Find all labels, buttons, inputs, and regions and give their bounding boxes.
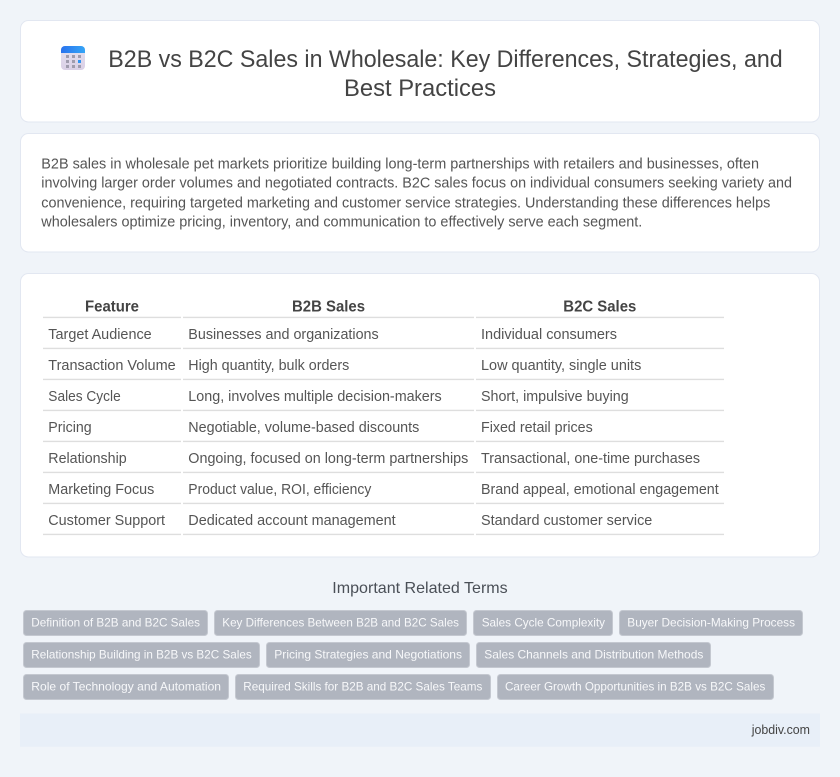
row: pricing: Negotiable, volume-based discounts [188,420,419,436]
tag [266,642,470,668]
tag [24,610,208,636]
tag: Sales Cycle Complexity [482,616,605,630]
row: relationship [48,451,700,467]
panel: header [20,20,820,122]
tag: Pricing Strategies and Negotiations [274,648,462,662]
row: transaction volume [48,358,641,374]
text block: introduction paragraph: involving larger order volumes and negotiated contracts. B2C sales focus on individual consumers seeking variety and [41,175,792,191]
heading: important related terms: Important Related Terms [332,580,508,597]
title [108,46,783,102]
row: customer support: Standard customer service [481,513,652,529]
text block: introduction paragraph: wholesalers optimize pricing, inventory, and communication to effectively serve each segment. [40,214,642,230]
tag [24,674,228,700]
row: marketing focus: Product value, ROI, efficiency [188,482,372,498]
related term tags [24,610,802,700]
tag: Sales Channels and Distribution Methods [484,648,703,662]
row: sales cycle: Short, impulsive buying [481,389,629,405]
table header row [85,299,636,316]
text block: introduction paragraph [40,156,792,230]
row: target audience: Target Audience [48,327,152,343]
row: pricing [48,420,593,436]
tag [24,642,260,668]
footer [20,713,820,747]
row: relationship: Ongoing, focused on long-term partnerships [188,451,468,467]
tag [474,610,612,636]
tag: Role of Technology and Automation [31,680,221,694]
row: transaction volume: Low quantity, single units [481,358,641,374]
tag: Definition of B2B and B2C Sales [31,616,200,630]
row: customer support: Customer Support [48,513,165,529]
row: customer support: Dedicated account management [188,513,396,529]
row: relationship: Relationship [48,451,127,467]
row: marketing focus: Brand appeal, emotional engagement [481,482,719,498]
tag [620,610,802,636]
tag [498,674,774,700]
panel: comparison table [20,274,820,557]
row: marketing focus [48,482,719,498]
row: sales cycle [48,389,629,405]
text block: introduction paragraph: convenience, requiring targeted marketing and customer service strategies. Understanding these differences helps [41,195,770,211]
tag: Key Differences Between B2B and B2C Sales [222,616,459,630]
title: Best Practices [344,75,496,102]
footer source text: jobdiv.com [751,723,810,737]
row: transaction volume: Transaction Volume [48,358,176,374]
tag: Required Skills for B2B and B2C Sales Teams [243,680,482,694]
row: pricing: Pricing [48,420,92,436]
tag [476,642,710,668]
row: pricing: Fixed retail prices [481,420,593,436]
title: B2B vs B2C Sales in Wholesale: Key Differences, Strategies, and [108,46,783,73]
row: target audience: Individual consumers [481,327,617,343]
tag: Relationship Building in B2B vs B2C Sales [31,648,252,662]
row: target audience: Businesses and organizations [188,327,379,343]
row: transaction volume: High quantity, bulk orders [188,358,349,374]
row: sales cycle: Sales Cycle [48,389,121,405]
tag: Career Growth Opportunities in B2B vs B2C Sales [505,680,765,694]
row: sales cycle: Long, involves multiple decision-makers [188,389,442,405]
tag [214,610,466,636]
row: customer support [48,513,652,529]
tag [236,674,490,700]
row: marketing focus: Marketing Focus [48,482,154,498]
text block: introduction paragraph: B2B sales in wholesale pet markets prioritize building long-term partnerships with retailers and businesses, often [41,156,759,172]
table header row: B2B Sales [292,299,365,316]
row: relationship: Transactional, one-time purchases [481,451,700,467]
panel: introduction [20,134,820,252]
tag: Buyer Decision-Making Process [627,616,795,630]
row: target audience [48,327,617,343]
table header row: B2C Sales [563,299,636,316]
table header row: Feature [85,299,139,316]
icon: calendar [61,46,85,70]
